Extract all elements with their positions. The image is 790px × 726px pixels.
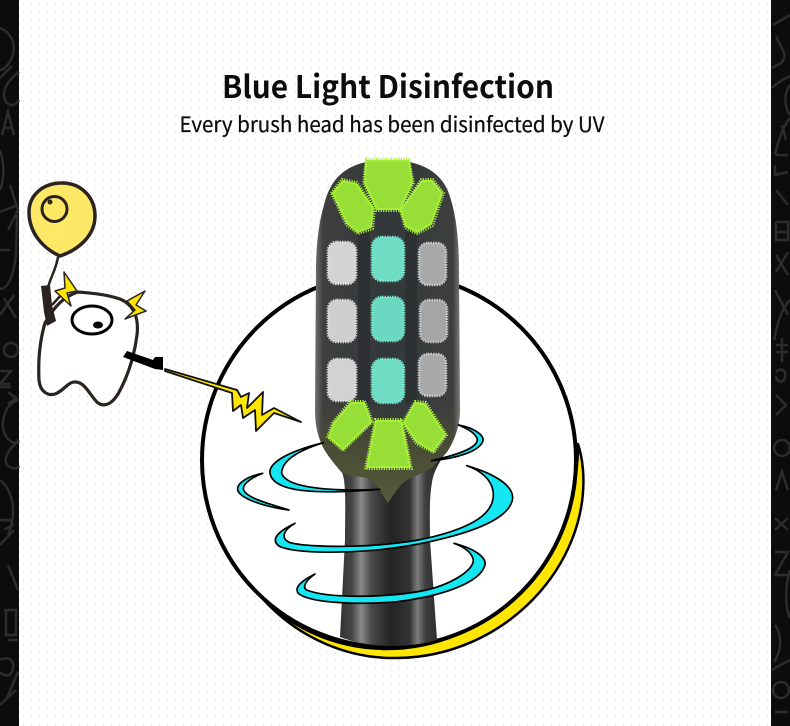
tuft: top centre <box>365 161 412 209</box>
icon: tooth arm <box>41 285 56 326</box>
brush head <box>315 160 460 503</box>
tuft: top left <box>333 181 373 232</box>
icon: left spark <box>55 272 77 306</box>
icon: tooth body <box>39 292 137 405</box>
subtitle: Every brush head has been disinfected by UV <box>180 109 605 139</box>
lightning bolt <box>165 369 301 431</box>
tuft: bottom centre <box>367 421 410 467</box>
tuft: top right <box>401 181 442 232</box>
white circle <box>202 273 576 647</box>
title: Blue Light Disinfection <box>222 62 554 107</box>
toothbrush <box>315 159 460 646</box>
swirl: upper right <box>432 425 483 461</box>
icon: balloon <box>29 183 95 288</box>
left decorative doodle band <box>0 0 19 726</box>
yellow crescent shadow behind circle <box>262 444 583 658</box>
dark shading between tufts <box>358 232 417 404</box>
green bristle tufts <box>329 161 445 467</box>
right decorative doodle band <box>771 0 790 726</box>
swirl: upper left <box>270 443 380 492</box>
tuft: bottom left <box>329 403 371 449</box>
icon: right spark <box>125 291 146 319</box>
swirl: small left <box>238 473 289 510</box>
icon: hand pointer <box>123 351 163 370</box>
tuft: bottom right <box>404 403 445 451</box>
brush silhouette and neck <box>330 450 447 646</box>
green tuft fringe <box>327 159 447 469</box>
grey and teal bristle tufts <box>328 237 447 403</box>
swirl: large middle <box>275 466 513 552</box>
swirl: lower <box>297 543 485 603</box>
olive base tint <box>320 405 455 503</box>
cyan UV swirls <box>238 425 513 603</box>
icon: tooth eye <box>72 306 112 334</box>
cartoon tooth with balloon <box>29 183 163 405</box>
